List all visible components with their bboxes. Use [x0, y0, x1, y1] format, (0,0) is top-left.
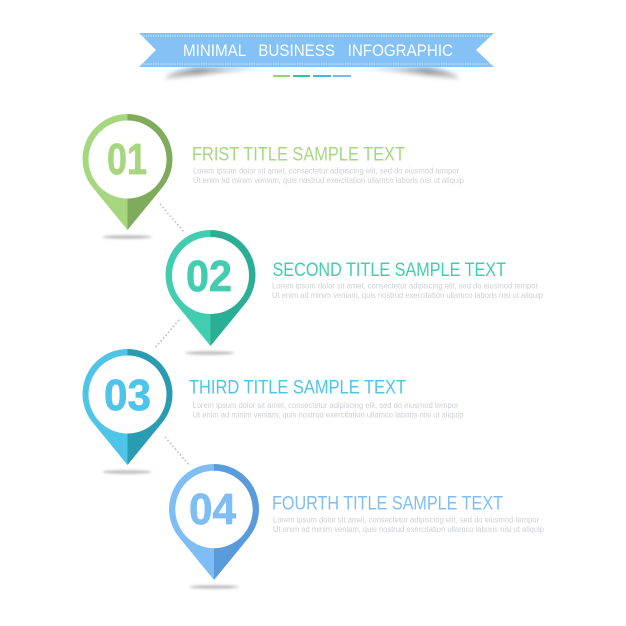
- connector 3 to 4: [165, 437, 189, 465]
- colour dashes: [273, 75, 351, 77]
- text block 01: Ut enim ad minim veniam, quis nostrud exercitation ullamco laboris nisi ut aliquip: [193, 176, 465, 185]
- connector 1 to 2: [160, 204, 184, 232]
- title: MINIMAL BUSINESS INFOGRAPHIC: [183, 41, 453, 60]
- text block 04: Ut enim ad minim veniam, quis nostrud exercitation ullamco laboris nisi ut aliquip: [273, 525, 545, 534]
- text block 04: Lorem ipsum dolor sit amet, consectetur adipiscing elit, sed do eiusmod tempor: [273, 516, 539, 524]
- text block 01: FRIST TITLE SAMPLE TEXT: [192, 144, 405, 166]
- pin 04: [169, 464, 259, 589]
- text block 01: Lorem ipsum dolor sit amet, consectetur adipiscing elit, sed do eiusmod tempor: [193, 166, 459, 176]
- pin 02: [166, 230, 255, 355]
- text block 02: Ut enim ad minim veniam, quis nostrud exercitation ullamco laboris nisi ut aliquip: [272, 291, 544, 300]
- text block 03: Lorem ipsum dolor sit amet, consectetur adipiscing elit, sed do eiusmod tempor: [192, 401, 459, 410]
- banner shadow: [164, 67, 460, 79]
- pin 01: [83, 114, 172, 239]
- text block 03: Ut enim ad minim veniam, quis nostrud exercitation ullamco laboris nisi ut aliquip: [192, 410, 464, 420]
- text block 02: [272, 259, 544, 300]
- text block 02: SECOND TITLE SAMPLE TEXT: [272, 259, 506, 281]
- pin 01: 01: [107, 135, 147, 184]
- pin 03: 03: [104, 371, 151, 420]
- connector 2 to 3: [155, 320, 179, 348]
- text block 04: [272, 492, 545, 534]
- pin 04: 04: [189, 485, 236, 534]
- text block 01: [192, 144, 465, 185]
- text block 04: FOURTH TITLE SAMPLE TEXT: [272, 492, 503, 514]
- pin 02: 02: [186, 252, 232, 301]
- text block 03: THIRD TITLE SAMPLE TEXT: [189, 376, 406, 398]
- text block 03: [189, 376, 464, 420]
- title banner: [139, 33, 494, 67]
- pin 03: [83, 349, 172, 474]
- text block 02: Lorem ipsum dolor sit amet, consectetur adipiscing elit, sed do eiusmod tempor: [272, 282, 538, 290]
